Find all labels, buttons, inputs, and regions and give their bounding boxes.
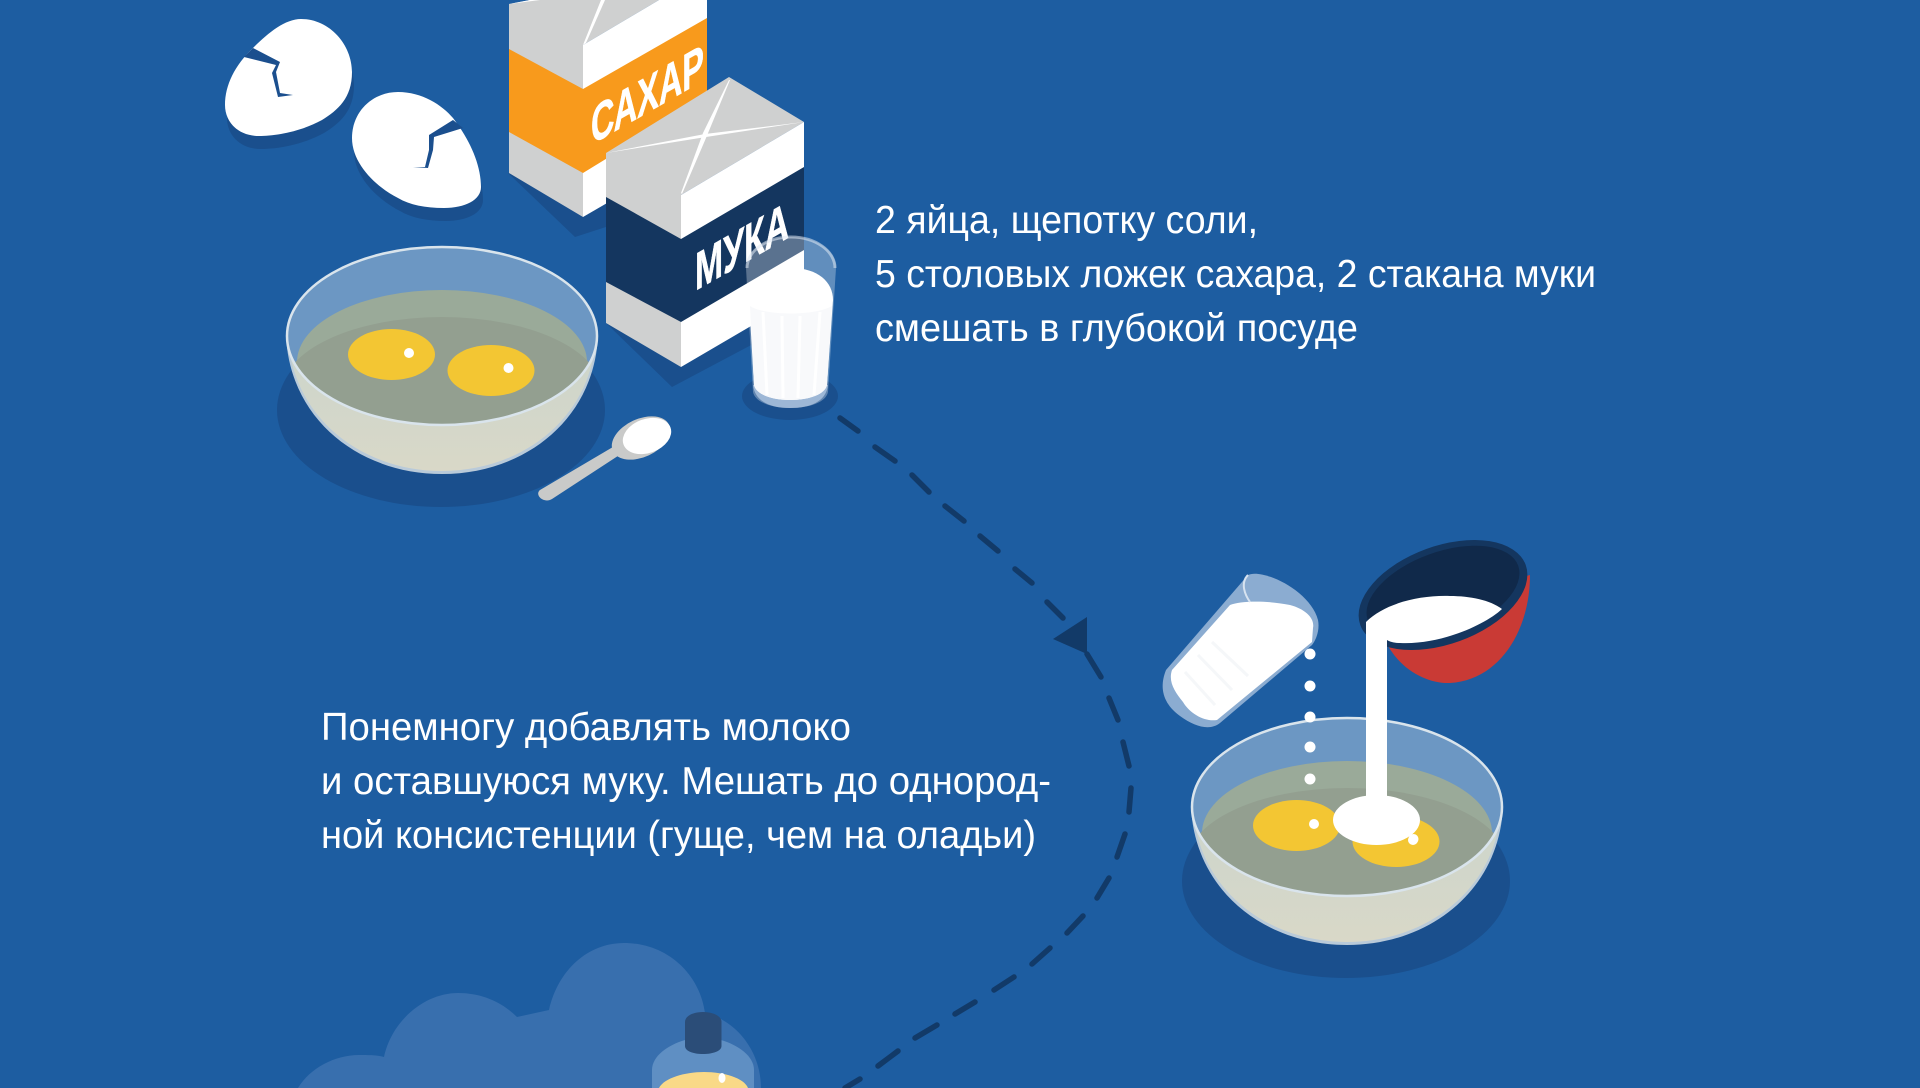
yolk	[448, 345, 534, 396]
step 2 text: и оставшуюся муку. Мешать до однород-	[321, 760, 1051, 803]
milk puddle	[1333, 795, 1420, 845]
red pot	[1344, 519, 1542, 800]
box shadows	[508, 173, 770, 387]
icon: cracked egg right	[352, 92, 483, 221]
dashed arrow	[840, 418, 1131, 1088]
milk in pot and stream	[1366, 596, 1502, 800]
flour label: МУКА	[695, 190, 789, 303]
step 2 text: Понемногу добавлять молоко	[321, 706, 851, 749]
spoon	[538, 408, 677, 500]
sugar carton	[509, 0, 707, 217]
mixing bowl with pouring milk	[1182, 718, 1510, 978]
bottle cap	[685, 1012, 722, 1054]
icon: cracked egg left	[225, 19, 354, 149]
yolk	[348, 329, 435, 380]
step 2 text	[321, 706, 1051, 857]
oil bottle	[652, 1012, 754, 1088]
step 1 text	[875, 199, 1596, 350]
milk glass	[742, 237, 838, 420]
infographic illustration	[225, 0, 1594, 1088]
step 1 text: 2 яйца, щепотку соли,	[875, 199, 1258, 242]
cloud of steam	[298, 943, 761, 1088]
flour carton	[606, 77, 804, 367]
step 2 text: ной консистенции (гуще, чем на оладьи)	[321, 814, 1036, 857]
step 1 text: 5 столовых ложек сахара, 2 стакана муки	[875, 253, 1596, 296]
step 1 text: смешать в глубокой посуде	[875, 307, 1358, 350]
tilted milk glass	[1163, 574, 1319, 727]
falling drops	[1304, 648, 1316, 784]
mixing bowl with eggs	[277, 247, 605, 507]
